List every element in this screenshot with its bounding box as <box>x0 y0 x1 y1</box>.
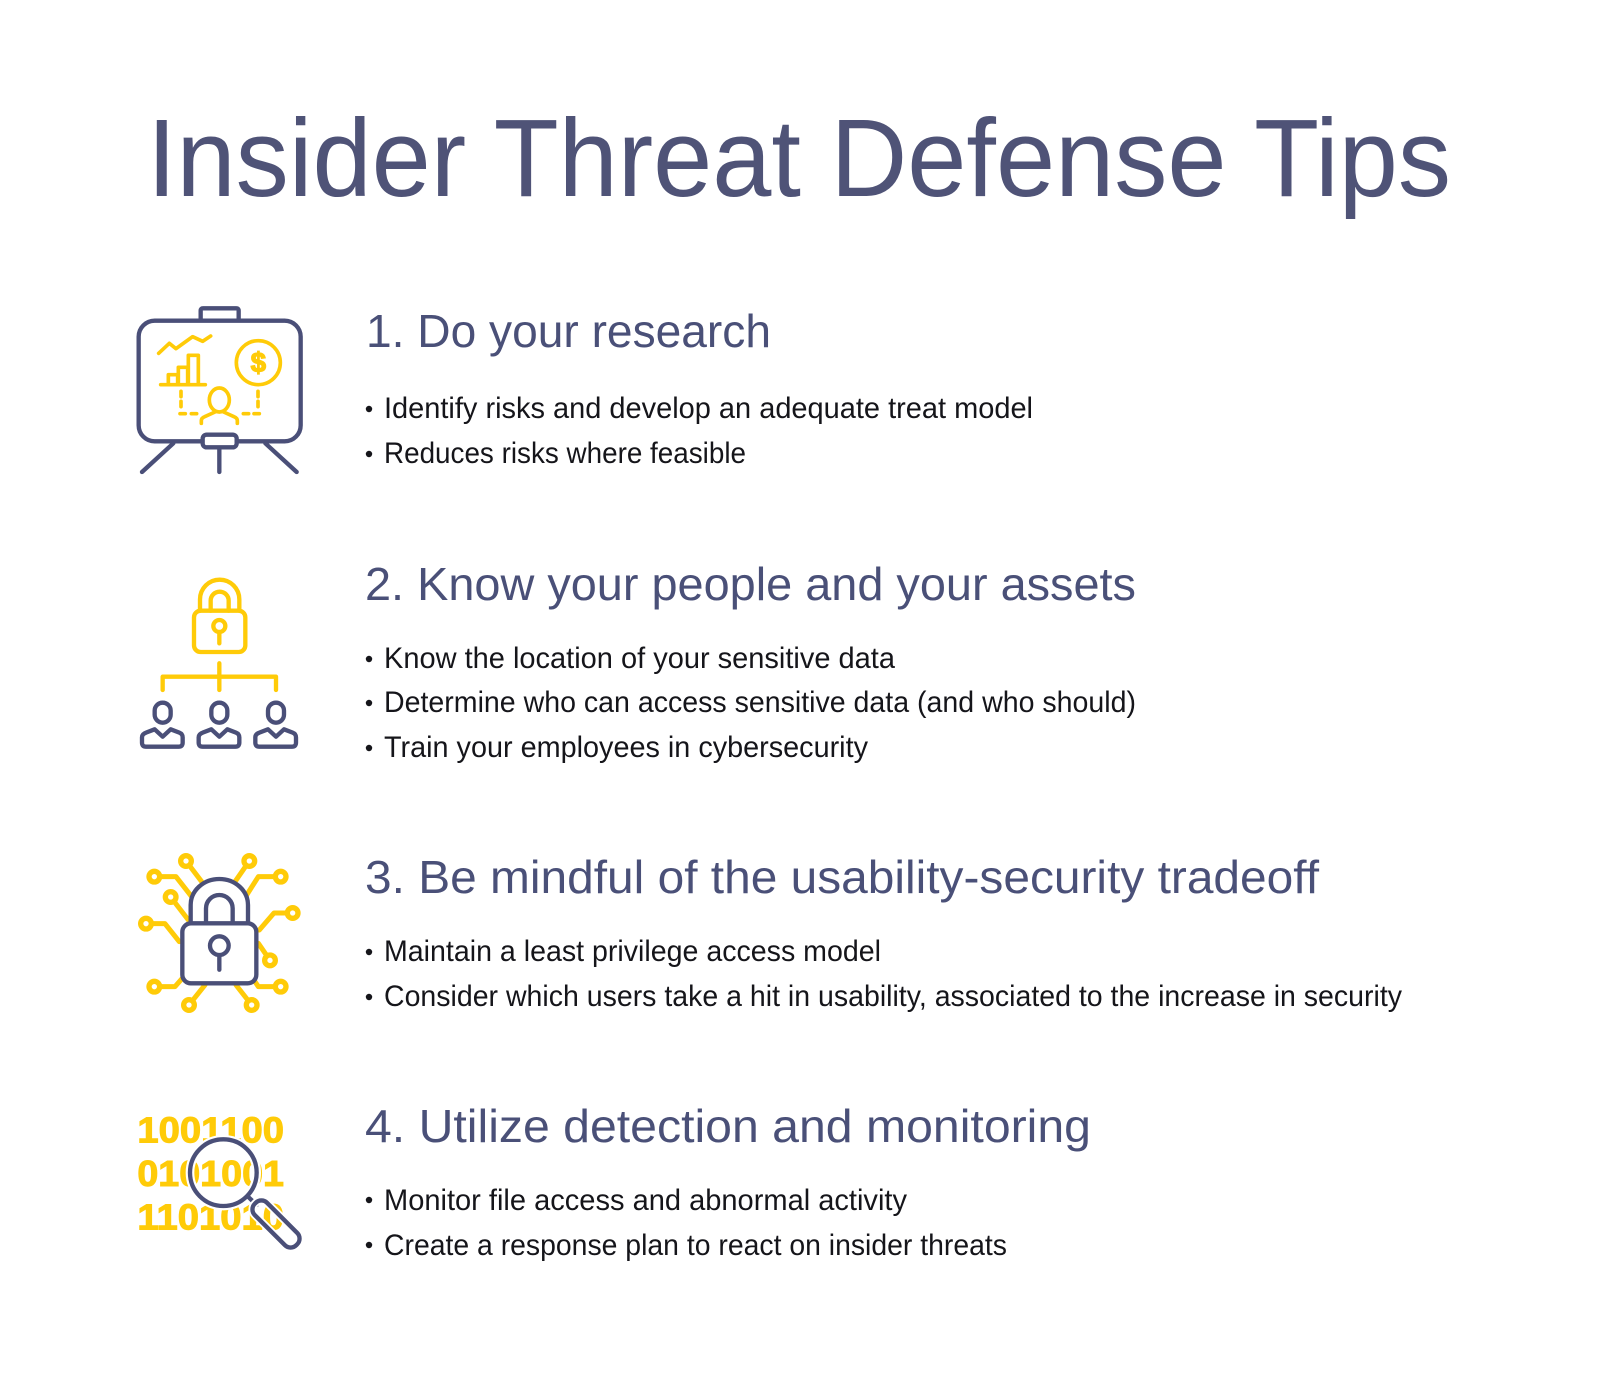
panel: tip 2 know your people and assets <box>142 558 1136 764</box>
bullet list 4: Monitor file access and abnormal activity <box>384 1184 907 1217</box>
bullet list 3: Consider which users take a hit in usability, associated to the increase in security <box>384 980 1402 1013</box>
bullet list 3: Maintain a least privilege access model <box>384 935 881 968</box>
bullet list 2: Know the location of your sensitive data <box>384 642 895 675</box>
bullet list 2 <box>366 642 1136 764</box>
icon: presentation board <box>139 308 301 472</box>
bullet list 4 <box>366 1184 1007 1262</box>
panel: tip 4 detection and monitoring <box>137 1100 1091 1262</box>
icon: magnifier over binary: 1001100 <box>137 1110 284 1151</box>
panel: tip 3 usability-security tradeoff <box>141 851 1402 1013</box>
bullet list 3 <box>366 935 1402 1013</box>
bullet list 2: Determine who can access sensitive data (and who should) <box>384 686 1136 719</box>
icon: magnifier over binary: 1101010 <box>137 1196 284 1237</box>
icon: circuit padlock <box>141 856 298 1010</box>
icon: lock over people hierarchy <box>142 580 296 747</box>
bullet list 1 <box>366 392 1033 470</box>
heading 2: 2. Know your people and your assets <box>365 558 1136 610</box>
bullet list 4: Create a response plan to react on insider threats <box>384 1229 1007 1262</box>
heading 4: 4. Utilize detection and monitoring <box>365 1100 1091 1152</box>
bullet list 1: Identify risks and develop an adequate treat model <box>384 392 1033 425</box>
panel: tip 1 do your research <box>139 305 1033 472</box>
title: Insider Threat Defense Tips <box>147 97 1451 220</box>
icon: presentation board: $ <box>251 347 266 378</box>
heading 1: 1. Do your research <box>366 305 771 357</box>
heading 3: 3. Be mindful of the usability-security tradeoff <box>365 851 1319 903</box>
bullet list 1: Reduces risks where feasible <box>384 437 746 470</box>
bullet list 2: Train your employees in cybersecurity <box>384 731 868 764</box>
icon: magnifier over binary: 0101001 <box>137 1153 284 1194</box>
icon: magnifier over binary <box>137 1110 303 1251</box>
